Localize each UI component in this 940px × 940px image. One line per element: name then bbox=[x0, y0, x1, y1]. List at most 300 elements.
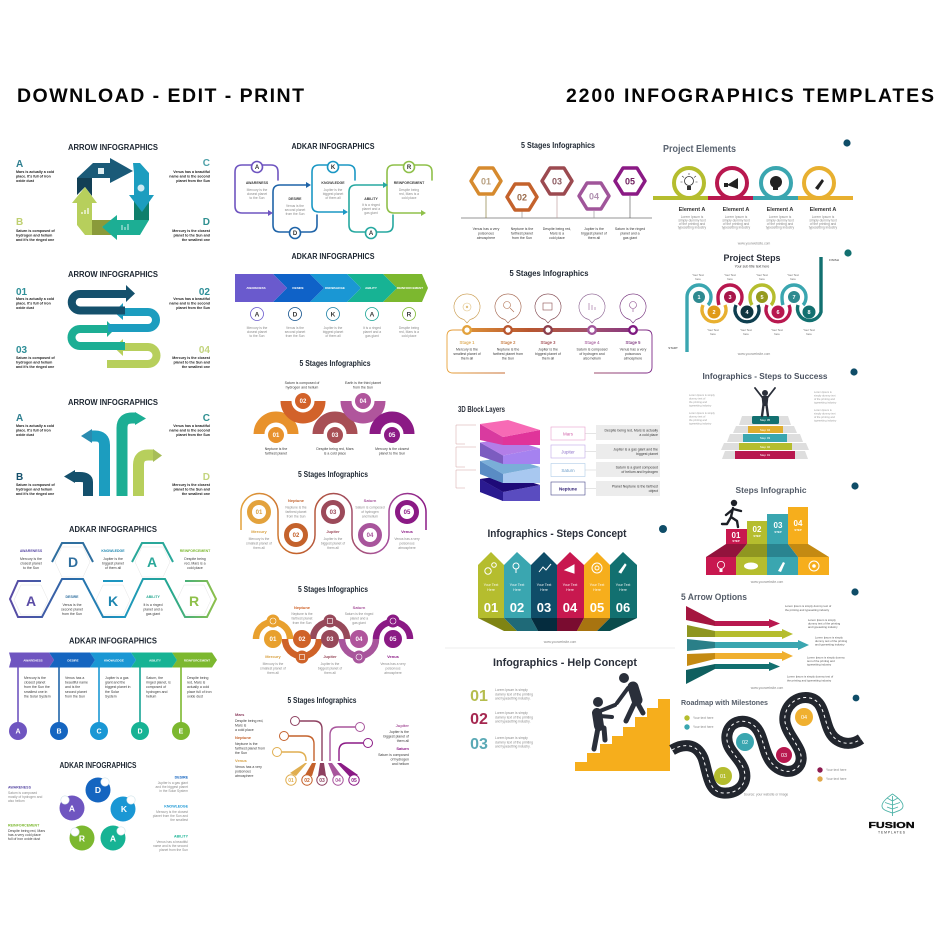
hexagon numbers: 01 bbox=[481, 176, 491, 186]
hexagon texts: of them all bbox=[105, 566, 121, 570]
stems bbox=[486, 196, 630, 218]
bracket bbox=[447, 330, 652, 373]
stage captions: Saturn is the ringed bbox=[615, 227, 645, 231]
bent arrows bbox=[64, 412, 162, 496]
right notes: Venus has a beautiful bbox=[156, 840, 188, 844]
label A: oxide dust bbox=[16, 433, 35, 437]
stage columns: also helium bbox=[583, 356, 601, 360]
stage captions: Mars is a bbox=[550, 232, 564, 236]
numbered items: and typesetting industry. bbox=[495, 720, 531, 724]
chevron band: AWARENESS bbox=[246, 286, 266, 290]
right lorem: simply dummy text bbox=[814, 394, 836, 398]
number circles: 02 bbox=[300, 399, 307, 405]
tree left texts: a cold place bbox=[235, 728, 254, 732]
panel: 3d block layers bbox=[456, 405, 660, 501]
label B: Saturn is composed of bbox=[16, 229, 56, 233]
element columns: typesetting industry bbox=[766, 226, 795, 230]
stairs bbox=[575, 699, 670, 771]
wave texts: Venus bbox=[401, 529, 414, 534]
panel: 5 stages interlocked bbox=[256, 585, 410, 675]
timeline texts: oxide dust bbox=[187, 694, 203, 698]
step dots: 3 bbox=[728, 295, 732, 301]
step numbers: STEP bbox=[753, 534, 761, 538]
left lorem: the printing and bbox=[689, 418, 707, 422]
label 01: oxide dust bbox=[16, 306, 35, 310]
label A: Mars is actually a cold bbox=[16, 170, 54, 174]
label A: A bbox=[16, 413, 23, 424]
left notes: mostly of hydrogen and bbox=[8, 795, 42, 799]
interlocked texts: Jupiter is the bbox=[321, 662, 340, 666]
step captions: here bbox=[774, 332, 780, 336]
arrow notes: dummy text of the printing bbox=[808, 622, 841, 626]
arrow notes: and typesetting industry bbox=[815, 642, 845, 646]
note texts: of helium and hydrogen bbox=[621, 470, 658, 474]
stage captions: Despite being red, bbox=[543, 227, 571, 231]
timeline texts: second planet bbox=[65, 690, 87, 694]
stage columns: of hydrogen and bbox=[579, 352, 605, 356]
divider bbox=[445, 647, 675, 649]
title: ARROW INFOGRAPHICS bbox=[68, 398, 159, 407]
label 01 bbox=[16, 287, 54, 310]
label C bbox=[169, 413, 210, 437]
label 02: name and is the second bbox=[169, 302, 210, 306]
chevron texts: from the Sun bbox=[286, 334, 305, 338]
hexagon letters: A bbox=[147, 554, 157, 570]
loop texts bbox=[246, 181, 425, 216]
label B: and it's the ringed one bbox=[16, 492, 54, 496]
stage columns: Neptune is the bbox=[497, 348, 519, 352]
interlocked texts: biggest planet of bbox=[318, 666, 342, 670]
legend right bbox=[817, 767, 847, 782]
caption: www.yourwebsite.com bbox=[738, 352, 771, 356]
label 04 bbox=[172, 345, 211, 369]
interlocked numbers: 05 bbox=[390, 636, 397, 643]
arrow notes: and typesetting industry bbox=[808, 625, 838, 629]
wave numbers: 02 bbox=[293, 533, 300, 539]
chevron badge letters: A bbox=[370, 311, 375, 318]
badge bbox=[851, 482, 859, 490]
label B: and it's the ringed one bbox=[16, 238, 54, 242]
interlocked texts bbox=[260, 605, 406, 675]
stacked blocks bbox=[480, 420, 540, 501]
stage captions: farthest planet bbox=[511, 232, 533, 236]
wave texts: Venus has a very bbox=[394, 537, 420, 541]
label words: Neptune bbox=[559, 486, 577, 492]
loop texts: second planet bbox=[285, 208, 305, 212]
step numbers: STEP bbox=[794, 528, 802, 532]
title: Infographics - Steps to Success bbox=[702, 371, 828, 381]
stage columns: them all bbox=[542, 356, 554, 360]
stage captions bbox=[473, 227, 645, 240]
stems and circles: E bbox=[179, 728, 184, 736]
right lorem: typesetting industry bbox=[814, 400, 837, 404]
numbered items: Lorem Ipsum is simply bbox=[495, 711, 528, 715]
label A bbox=[16, 159, 54, 183]
label D bbox=[172, 472, 211, 496]
nodes bbox=[463, 326, 637, 334]
chevron texts: red, Mars is a bbox=[399, 330, 419, 334]
element columns: Element A bbox=[767, 207, 793, 213]
step captions: Your Text bbox=[707, 328, 719, 332]
caption: www.yourwebsite.com bbox=[751, 580, 784, 584]
label 03: and it's the ringed one bbox=[16, 365, 54, 369]
loop texts: closest planet bbox=[247, 192, 267, 196]
timeline texts: giant and the bbox=[105, 681, 125, 685]
wave numbers: 03 bbox=[330, 510, 337, 516]
chevron texts bbox=[247, 326, 419, 338]
stage texts: planet to the Sun bbox=[379, 452, 405, 456]
label C: C bbox=[203, 413, 210, 424]
finish label: FINISH bbox=[829, 258, 839, 262]
stage texts: Earth is the third planet bbox=[345, 381, 381, 385]
step captions: Your Text bbox=[740, 328, 752, 332]
label 01: Mars is actually a cold bbox=[16, 297, 54, 301]
hexagon texts: Despite being bbox=[184, 557, 206, 561]
numbered items: dummy text of the printing bbox=[495, 715, 533, 719]
chevron texts: Despite being bbox=[399, 326, 419, 330]
loop texts: to the Sun bbox=[249, 196, 265, 200]
step captions: here bbox=[710, 332, 716, 336]
panel: adkar chevrons bbox=[235, 252, 428, 338]
left lorem bbox=[689, 393, 716, 426]
logo: fusion templates bbox=[868, 794, 914, 834]
title: Project Elements bbox=[663, 144, 736, 155]
hexagon texts: REINFORCEMENT bbox=[180, 549, 211, 553]
loop badge letters: A bbox=[369, 231, 374, 237]
panel: project elements bbox=[653, 139, 853, 246]
wave texts bbox=[246, 498, 420, 550]
loop texts: of them all bbox=[325, 196, 341, 200]
title: 5 Stages Infographics bbox=[298, 585, 368, 594]
label 04: the smallest one bbox=[182, 365, 210, 369]
label A: place. It's full of iron bbox=[16, 428, 51, 432]
label 04: Mercury is the closest bbox=[172, 356, 211, 360]
chevron texts: biggest planet bbox=[323, 330, 343, 334]
element columns: simply dummy text bbox=[809, 218, 837, 222]
linked loops bbox=[235, 165, 432, 232]
stage captions: biggest planet of bbox=[581, 232, 607, 236]
left lorem: Lorem Ipsum is simply bbox=[689, 393, 716, 397]
loop badge letters: R bbox=[407, 165, 412, 171]
stage columns: Stage 1 bbox=[460, 340, 475, 345]
node numbers: 04 bbox=[335, 778, 341, 784]
left lorem: typesetting industry bbox=[689, 422, 712, 426]
badge bbox=[850, 368, 858, 376]
wave texts: poisonous bbox=[399, 542, 415, 546]
half rings bbox=[259, 401, 409, 434]
tree left texts bbox=[235, 712, 265, 778]
hexagon texts: gas giant bbox=[146, 612, 160, 616]
wave numbers: 04 bbox=[367, 533, 374, 539]
step captions: here bbox=[759, 277, 765, 281]
panel: 5 arrow options bbox=[681, 588, 859, 690]
step numbers: 04 bbox=[794, 519, 803, 528]
hexagon texts: It is a ringed bbox=[143, 603, 163, 607]
label 01: 01 bbox=[16, 287, 28, 298]
badge bbox=[851, 588, 859, 596]
column labels: Your Text bbox=[537, 583, 551, 587]
step captions: Your Text bbox=[756, 273, 768, 277]
right notes: Mercury is the closest bbox=[156, 810, 188, 814]
timeline texts: and is the bbox=[65, 685, 80, 689]
label D: planet to the Sun and bbox=[173, 488, 210, 492]
label 04: 04 bbox=[199, 345, 210, 356]
chevron texts: closest planet bbox=[247, 330, 267, 334]
timeline texts: place full of iron bbox=[187, 690, 212, 694]
hexagon numbers: 03 bbox=[552, 176, 562, 186]
hexagon texts: cold place bbox=[187, 566, 203, 570]
hexagon texts: planet and a bbox=[143, 608, 163, 612]
stems and circles: B bbox=[56, 728, 62, 736]
stage texts: Despite being red, Mars bbox=[316, 447, 354, 451]
right notes: planet from the Sun bbox=[159, 848, 188, 852]
interlocked texts: Mercury is the bbox=[263, 662, 284, 666]
timeline texts: closest planet bbox=[24, 681, 45, 685]
column numbers bbox=[484, 600, 630, 615]
right notes: name and is the second bbox=[153, 844, 188, 848]
column labels: Your Text bbox=[510, 583, 524, 587]
title: ADKAR INFOGRAPHICS bbox=[292, 142, 375, 151]
numbered items: 01 bbox=[470, 688, 488, 705]
left notes: full of iron oxide dust bbox=[8, 837, 40, 841]
wave texts: Saturn bbox=[364, 498, 377, 503]
node numbers: 02 bbox=[304, 778, 310, 784]
timeline texts: helium bbox=[146, 694, 156, 698]
tree right texts: Jupiter is the bbox=[389, 730, 409, 734]
winding road bbox=[672, 698, 861, 793]
band icons bbox=[717, 561, 819, 572]
hexagon numbers: 02 bbox=[517, 192, 527, 202]
right lorem: Lorem Ipsum is bbox=[814, 408, 832, 412]
tree right texts: Jupiter bbox=[396, 723, 409, 728]
arrow notes: Lorem Ipsum is simply bbox=[815, 636, 843, 640]
step captions: Your Text bbox=[724, 273, 736, 277]
column numbers: 02 bbox=[510, 600, 524, 615]
tree left texts: the Sun bbox=[235, 751, 247, 755]
column icons bbox=[485, 563, 626, 574]
hexagon texts: from the Sun bbox=[62, 612, 82, 616]
wave texts: Saturn is composed bbox=[355, 506, 385, 510]
chevron bar: ABILITY bbox=[149, 658, 161, 662]
element columns: Element A bbox=[679, 207, 705, 213]
wave texts: smallest planet of bbox=[246, 542, 272, 546]
badge bbox=[844, 249, 852, 257]
element columns: typesetting industry bbox=[722, 226, 751, 230]
winding track bbox=[687, 257, 821, 352]
legend right: Your text here bbox=[826, 768, 847, 772]
label C: planet from the Sun bbox=[176, 179, 210, 183]
chevron bar: KNOWLEDGE bbox=[104, 658, 124, 662]
hexagon letters: A bbox=[26, 593, 36, 609]
step numbers: STEP bbox=[774, 530, 782, 534]
label 02: planet from the Sun bbox=[176, 306, 210, 310]
hexagon texts: to the Sun bbox=[23, 566, 39, 570]
chevron band: KNOWLEDGE bbox=[325, 286, 345, 290]
legend left: Your text here bbox=[693, 716, 714, 720]
stage columns: the Sun bbox=[502, 356, 514, 360]
timeline texts: beautiful name bbox=[65, 681, 88, 685]
tree left texts: Venus has a very bbox=[235, 765, 262, 769]
left notes: Saturn is composed bbox=[8, 791, 37, 795]
note texts bbox=[604, 428, 658, 493]
step dots: 1 bbox=[697, 295, 701, 301]
number circles: 04 bbox=[360, 399, 367, 405]
step captions: here bbox=[727, 277, 733, 281]
step numbers: STEP bbox=[732, 539, 740, 543]
label 01: place. It's full of iron bbox=[16, 302, 51, 306]
number circles: 01 bbox=[273, 433, 280, 439]
loop texts: planet and a bbox=[362, 207, 380, 211]
stage columns: biggest planet of bbox=[535, 352, 561, 356]
stems and circles: A bbox=[15, 728, 21, 736]
label boxes bbox=[551, 427, 585, 495]
panel: steps to success bbox=[689, 368, 858, 459]
arrow notes: text of the printing and bbox=[807, 659, 835, 663]
title: Project Steps bbox=[724, 253, 780, 264]
left notes: REINFORCEMENT bbox=[8, 824, 40, 828]
loop texts: AWARENESS bbox=[246, 181, 269, 185]
tree left texts: Neptune bbox=[235, 735, 252, 740]
milestones bbox=[714, 708, 813, 785]
label B bbox=[16, 472, 56, 496]
label D: the smallest one bbox=[182, 492, 210, 496]
grey note boxes bbox=[596, 425, 660, 496]
wave texts: atmosphere bbox=[398, 546, 416, 550]
wave texts: of hydrogen bbox=[361, 510, 379, 514]
line with rings bbox=[653, 168, 853, 200]
timeline texts: the Solar System bbox=[24, 694, 51, 698]
label 03: 03 bbox=[16, 345, 28, 356]
column numbers: 05 bbox=[590, 600, 604, 615]
panel: arrow infographics bent bbox=[16, 398, 211, 496]
tree left texts: Neptune is the bbox=[235, 742, 258, 746]
interlocked texts: Jupiter bbox=[323, 654, 337, 659]
circle cycle: A bbox=[69, 804, 75, 814]
chevron texts: Venus is the bbox=[286, 326, 304, 330]
stage captions: Neptune is the bbox=[511, 227, 533, 231]
label C: planet from the Sun bbox=[176, 433, 210, 437]
chevron texts: Jupiter is the bbox=[324, 326, 343, 330]
note texts: biggest planet bbox=[636, 452, 658, 456]
connectors bbox=[585, 434, 596, 488]
teardrops bbox=[290, 763, 358, 777]
column labels: Here bbox=[513, 588, 521, 592]
tree right texts: Saturn is composed bbox=[378, 753, 409, 757]
chevron texts: of them all bbox=[325, 334, 341, 338]
hexagon texts: Venus is the bbox=[62, 603, 82, 607]
hexagon texts: Jupiter is the bbox=[103, 557, 123, 561]
label C bbox=[169, 158, 210, 183]
stage columns: Jupiter is the bbox=[538, 348, 558, 352]
loop texts: Jupiter is the bbox=[324, 188, 343, 192]
interlocked texts: them all bbox=[267, 671, 279, 675]
title: Infographics - Help Concept bbox=[493, 657, 637, 669]
stage columns: farthest planet from bbox=[493, 352, 523, 356]
chevron badge letters: A bbox=[255, 311, 260, 318]
chevron texts: to the Sun bbox=[249, 334, 265, 338]
arrow notes: typesetting industry bbox=[807, 662, 832, 666]
chevron bar bbox=[9, 652, 217, 668]
tree left texts: atmosphere bbox=[235, 774, 254, 778]
panel: infographics help concept bbox=[470, 657, 670, 771]
step numbers: 02 bbox=[753, 525, 762, 534]
chevron texts: planet and a bbox=[363, 330, 381, 334]
timeline texts: ringed planet, is bbox=[146, 681, 171, 685]
wave texts: Neptune is the bbox=[285, 506, 307, 510]
wave texts: them all bbox=[253, 546, 265, 550]
bracket lines bbox=[456, 425, 476, 488]
element columns: of the printing and bbox=[810, 222, 836, 226]
arrow notes: Lorem Ipsum is simply bbox=[808, 618, 836, 622]
chevron texts: second planet bbox=[285, 330, 305, 334]
chevron badge letters: R bbox=[407, 311, 412, 318]
stage columns: Venus has a very bbox=[620, 348, 647, 352]
wave texts: them all bbox=[327, 546, 339, 550]
stage texts: from the Sun bbox=[353, 386, 373, 390]
grey pyramid bbox=[721, 416, 809, 459]
column labels: Here bbox=[566, 588, 574, 592]
note texts: Jupiter is a gas giant and the bbox=[613, 448, 658, 452]
arrow notes: Lorem Ipsum is simply dummy text of bbox=[787, 674, 833, 678]
tree left texts: Venus bbox=[235, 758, 248, 763]
title: ADKAR INFOGRAPHICS bbox=[69, 636, 158, 646]
panel: 5 stages semicircles bbox=[259, 359, 409, 456]
panel: 5 stages tree bbox=[235, 696, 410, 785]
arrow notes: Lorem Ipsum is simply dummy text of bbox=[785, 604, 831, 608]
right lorem bbox=[814, 390, 837, 422]
timeline texts: hydrogen and bbox=[146, 690, 167, 694]
right notes: planet from the Sun and bbox=[153, 814, 188, 818]
note texts: a cold place bbox=[639, 433, 658, 437]
stage texts: Neptune is the bbox=[265, 447, 287, 451]
title: 3D Block Layers bbox=[458, 405, 505, 414]
left notes bbox=[8, 786, 45, 841]
title: ADKAR INFOGRAPHICS bbox=[292, 252, 375, 261]
stage texts: Mercury is the closest bbox=[375, 447, 409, 451]
branching lines bbox=[282, 721, 363, 761]
hexagon letters: K bbox=[108, 593, 118, 609]
stage captions: from the Sun bbox=[512, 236, 532, 240]
interlocked texts: farthest planet bbox=[292, 616, 313, 620]
tree right texts: Saturn bbox=[396, 746, 410, 751]
wave texts: Jupiter is the bbox=[324, 537, 343, 541]
loop badge letters: K bbox=[331, 165, 336, 171]
loop texts: DESIRE bbox=[288, 197, 302, 201]
chevron bar: REINFORCEMENT bbox=[184, 658, 210, 662]
hexagon texts: second planet bbox=[61, 608, 83, 612]
stage captions: planet and a bbox=[620, 232, 640, 236]
tree right texts: and helium bbox=[392, 762, 409, 766]
hexagon numbers: 05 bbox=[625, 176, 635, 186]
wave texts: Jupiter bbox=[326, 529, 340, 534]
title: 5 Stages Infographics bbox=[510, 269, 589, 278]
interlocked texts: gas giant bbox=[352, 621, 366, 625]
right notes bbox=[153, 776, 189, 852]
title: ARROW INFOGRAPHICS bbox=[68, 270, 159, 279]
numbered items: Lorem Ipsum is simply bbox=[495, 688, 528, 692]
loop texts: It is a ringed bbox=[362, 203, 380, 207]
interlocked numbers: 02 bbox=[299, 636, 306, 643]
title: 5 Arrow Options bbox=[681, 592, 747, 602]
wave numbers bbox=[256, 510, 411, 539]
pins bbox=[454, 294, 646, 323]
interlocked texts: Neptune is the bbox=[291, 612, 313, 616]
interlocked numbers: 03 bbox=[327, 636, 334, 643]
label D: planet to the Sun and bbox=[173, 234, 210, 238]
interlocked texts: from the Sun bbox=[293, 621, 312, 625]
label 02: 02 bbox=[199, 287, 210, 298]
right lorem: of the printing and bbox=[814, 397, 835, 401]
